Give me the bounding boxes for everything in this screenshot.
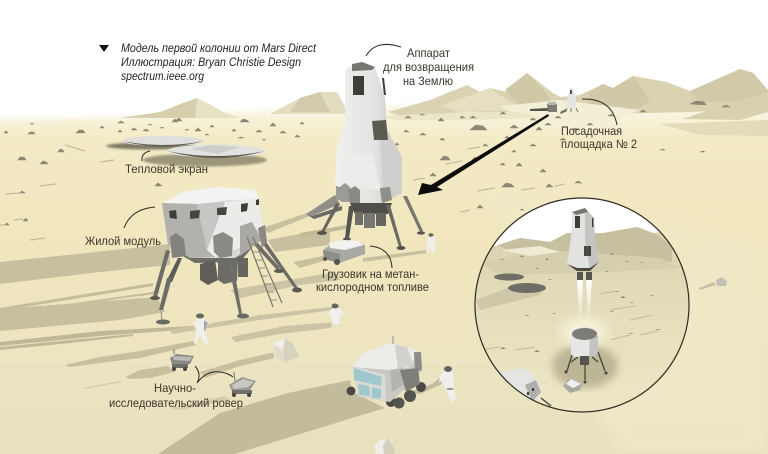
boarding ramp	[306, 195, 340, 216]
rover windshield	[354, 368, 382, 386]
astronaut near rocket	[426, 233, 436, 253]
rock to right of inset	[699, 277, 727, 290]
inset rocks	[500, 253, 661, 352]
label: landing site 2	[561, 99, 637, 151]
astronauts	[194, 233, 456, 402]
caption: Иллюстрация: Bryan Christie Design	[121, 55, 301, 69]
label: return vehicle: Аппарат	[407, 46, 450, 60]
label: return vehicle: для возвращения	[383, 60, 474, 74]
rover one	[170, 349, 194, 371]
inset heat shields	[494, 274, 524, 280]
astronaut near habitat	[194, 314, 209, 344]
exhaust flames	[577, 280, 583, 318]
heat shield shadows	[106, 142, 267, 166]
underside bowl	[172, 238, 260, 263]
long shadows of the habitat module	[0, 213, 427, 410]
small science rovers	[170, 349, 256, 397]
rover two	[229, 372, 256, 397]
leg pods	[336, 183, 350, 202]
label: heat shield	[125, 151, 208, 176]
label: landing site 2: Посадочная	[561, 124, 622, 138]
label: habitat module: Жилой модуль	[85, 234, 161, 248]
label: methane-oxygen truck: кислородном топливе	[316, 280, 429, 294]
astronaut by rover	[439, 366, 456, 402]
rock shadows	[0, 145, 565, 296]
label: landing site 2: площадка № 2	[561, 137, 637, 151]
boulder	[273, 338, 299, 363]
label: methane-oxygen truck	[316, 246, 429, 294]
heat shields	[122, 136, 265, 158]
shadow of the pressurised rover	[158, 378, 442, 454]
inset habitat	[500, 368, 542, 401]
engines	[350, 203, 392, 214]
caption	[121, 41, 317, 83]
landing site 2 in the distance	[530, 88, 578, 114]
ascending rocket	[567, 208, 599, 270]
inset truck	[563, 378, 582, 393]
label: methane-oxygen truck: Грузовик на метан-	[322, 267, 419, 281]
front legs	[166, 258, 182, 282]
label: science rover: Научно-	[154, 381, 196, 395]
label: science rover: исследовательский ровер	[109, 396, 243, 410]
label: science rover	[109, 366, 243, 410]
inset circle outline	[475, 198, 689, 412]
pressurised rover	[346, 336, 426, 408]
body	[162, 198, 263, 258]
rocks scattered across the plain	[4, 101, 730, 292]
label: habitat module	[85, 207, 161, 248]
caption: spectrum.ieee.org	[121, 69, 204, 83]
pods	[170, 233, 186, 258]
rear legs	[153, 250, 170, 297]
label: return vehicle: на Землю	[403, 74, 453, 88]
front legs	[345, 206, 354, 238]
inset circle: launch from the lander	[476, 198, 688, 406]
lander descent stage	[571, 327, 598, 358]
legend marker triangle	[99, 45, 109, 52]
boulder at bottom edge	[374, 438, 395, 454]
habitat module	[150, 187, 302, 324]
rocket body	[335, 62, 402, 203]
caption: Модель первой колонии от Mars Direct	[121, 41, 317, 55]
rear legs	[321, 203, 340, 232]
distant mountains	[120, 69, 768, 136]
windows	[169, 210, 177, 219]
rocket windows	[353, 76, 364, 95]
methane-oxygen truck	[323, 240, 365, 265]
habitat ladder	[247, 237, 282, 307]
inset ground	[476, 232, 688, 340]
label: heat shield: Тепловой экран	[125, 162, 208, 176]
label: return vehicle	[366, 44, 474, 88]
astronaut in centre	[329, 304, 344, 327]
arrow from landing site 2	[418, 114, 549, 195]
inset sky and mountains	[493, 198, 660, 246]
engines	[200, 260, 218, 285]
inset dark patch and glow	[552, 344, 618, 388]
return vehicle	[306, 62, 425, 250]
